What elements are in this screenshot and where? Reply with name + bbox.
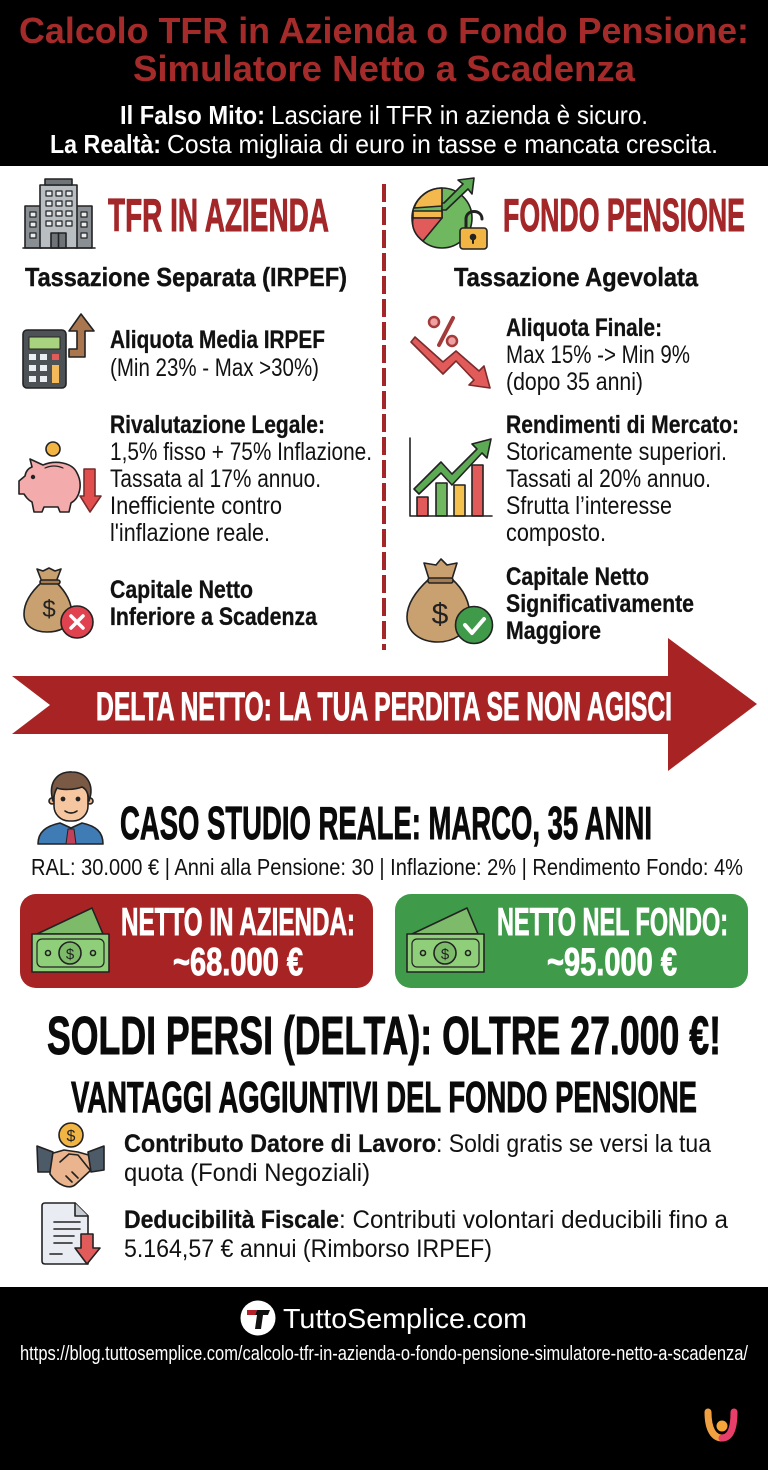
footer band	[0, 1287, 768, 1470]
text: rivalutazione legale: 1,5% fisso + 75% Inflazione.	[110, 438, 372, 466]
text: rendimenti di mercato: Tassati al 20% annuo.	[506, 465, 711, 493]
subtitle: La Realtà:	[50, 129, 161, 159]
brand name: TuttoSemplice.com	[283, 1303, 527, 1334]
text: capitale netto maggiore: Significativamente	[506, 590, 694, 618]
text: aliquota media: (Min 23% - Max >30%)	[110, 354, 319, 382]
icon: banknotes	[407, 908, 484, 972]
card: netto nel fondo	[395, 894, 748, 988]
icon: office building	[23, 179, 95, 248]
text: contributo datore: Contributo Datore di Lavoro	[124, 1130, 436, 1158]
text: rivalutazione legale: Inefficiente contro	[110, 492, 282, 520]
text: rivalutazione legale: l'inflazione reale.	[110, 519, 270, 547]
text: aliquota media	[110, 326, 325, 382]
text: aliquota finale: Aliquota Finale:	[506, 314, 662, 342]
card: netto in azienda: ~68.000 €	[173, 941, 303, 984]
icon: man in suit	[38, 772, 103, 844]
icon: piggy bank with down arrow	[19, 442, 101, 512]
icon: handshake with coin	[37, 1123, 104, 1187]
text: capitale netto inferiore: Capitale Netto	[110, 576, 253, 604]
text: deducibilita fiscale: : Contributi volontari deducibili fino a	[339, 1206, 728, 1234]
text: capitale netto maggiore	[506, 563, 694, 645]
icon: document with arrow	[42, 1203, 100, 1264]
heading: TFR in azienda: TFR IN AZIENDA	[108, 189, 329, 241]
text: rivalutazione legale: Rivalutazione Legale:	[110, 411, 325, 439]
icon: banknotes: $	[441, 946, 450, 963]
subtitle: Lasciare il TFR in azienda è sicuro.	[271, 100, 648, 130]
title	[19, 10, 749, 89]
text: rivalutazione legale	[110, 411, 372, 547]
text: deducibilita fiscale	[124, 1206, 728, 1263]
icon: money bag with cross	[24, 568, 93, 638]
icon: corner logo	[708, 1412, 734, 1438]
text: capitale netto maggiore: Maggiore	[506, 617, 601, 645]
subtitle	[50, 100, 718, 159]
title: Simulatore Netto a Scadenza	[133, 48, 636, 89]
icon: pie chart with lock	[412, 178, 487, 249]
text: capitale netto inferiore	[110, 576, 318, 631]
text: contributo datore: : Soldi gratis se versi la tua	[436, 1130, 711, 1158]
icon: money bag with check: $	[432, 598, 449, 631]
text: contributo datore	[124, 1130, 711, 1187]
text: aliquota finale	[506, 314, 690, 396]
icon: banknotes	[32, 908, 109, 972]
text: rivalutazione legale: Tassata al 17% annuo.	[110, 465, 321, 493]
subtitle: Costa migliaia di euro in tasse e mancata crescita.	[167, 129, 718, 159]
icon: money bag with check	[407, 559, 492, 644]
card: netto nel fondo: ~95.000 €	[547, 941, 677, 984]
subtitle: Il Falso Mito:	[120, 100, 265, 130]
text: aliquota media: Aliquota Media IRPEF	[110, 326, 325, 354]
card: netto in azienda: NETTO IN AZIENDA:	[121, 901, 355, 944]
card: netto in azienda	[20, 894, 373, 988]
text: contributo datore: quota (Fondi Negoziali)	[124, 1159, 370, 1187]
subheading: tassazione agevolata: Tassazione Agevolata	[454, 262, 698, 292]
text: rendimenti di mercato: Storicamente superiori.	[506, 438, 727, 466]
text: rendimenti di mercato: composto.	[506, 519, 606, 547]
icon: growth bar chart	[410, 438, 492, 516]
text: deducibilita fiscale: 5.164,57 € annui (Rimborso IRPEF)	[124, 1235, 492, 1263]
title: Calcolo TFR in Azienda o Fondo Pensione:	[19, 10, 749, 51]
text: aliquota finale: (dopo 35 anni)	[506, 368, 643, 396]
text: rendimenti di mercato: Sfrutta l’interesse	[506, 492, 672, 520]
subheading: tassazione separata: Tassazione Separata (IRPEF)	[25, 262, 347, 292]
text: capitale netto maggiore: Capitale Netto	[506, 563, 649, 591]
icon: TuttoSemplice logo	[240, 1300, 276, 1336]
text: aliquota finale: Max 15% -> Min 9%	[506, 341, 690, 369]
icon: banknotes: $	[66, 946, 75, 963]
arrow: delta netto	[12, 638, 757, 771]
text: rendimenti di mercato	[506, 411, 739, 547]
icon: handshake with coin: $	[67, 1128, 76, 1145]
icon: money bag with cross: $	[42, 596, 56, 623]
icon: falling percent arrow	[411, 317, 490, 388]
icon: calculator with arrow	[23, 314, 94, 388]
text: deducibilita fiscale: Deducibilità Fiscale	[124, 1206, 339, 1234]
text: capitale netto inferiore: Inferiore a Scadenza	[110, 603, 318, 631]
header band	[0, 0, 768, 166]
